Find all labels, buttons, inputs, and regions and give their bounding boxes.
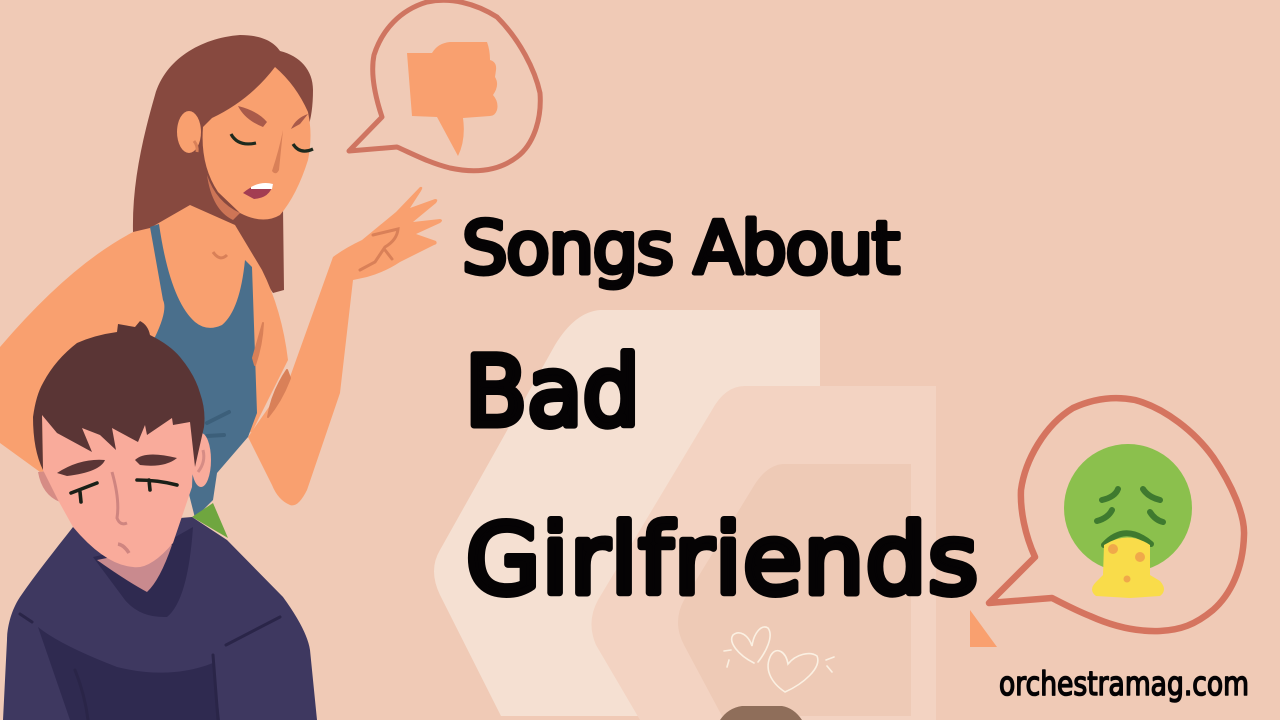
boy ear inner shade	[198, 450, 204, 472]
woman hair	[133, 35, 313, 293]
bubble outline	[989, 398, 1244, 631]
speech bubble: thumbs down	[349, 0, 540, 171]
tank top folds	[207, 412, 229, 436]
boy face	[42, 410, 195, 567]
collarbone	[213, 252, 227, 258]
boy left ear shade	[38, 470, 60, 502]
woman brows	[238, 106, 308, 129]
face mouth	[1104, 533, 1151, 545]
sweater collar shadow	[93, 527, 193, 617]
boy neck	[97, 545, 172, 592]
vomit	[1092, 538, 1164, 598]
boy hair	[33, 321, 204, 470]
boy mouth	[118, 544, 129, 553]
vomit spots	[1108, 544, 1145, 582]
icon: thumbs down	[407, 42, 498, 156]
woman body and shoulder arm	[0, 205, 288, 472]
title: Songs About: Songs About	[462, 206, 900, 290]
woman ear	[177, 111, 201, 153]
ear inner shade	[194, 141, 197, 152]
sweater lower shadow	[38, 627, 220, 720]
background hexagon shapes	[434, 310, 936, 720]
face brows and eyes	[1097, 489, 1163, 522]
icon: hearts	[724, 627, 834, 692]
woman eyes	[231, 134, 313, 151]
woman nose	[272, 130, 283, 173]
bubble outline	[349, 0, 540, 171]
woman face	[203, 67, 310, 220]
illustration: sad boy	[3, 321, 317, 720]
woman tank top	[150, 224, 257, 518]
orange triangle	[970, 610, 997, 647]
arm shadows	[253, 323, 290, 417]
title: Girlfriends: Girlfriends	[466, 504, 978, 616]
boy sweater	[3, 517, 317, 720]
green skirt	[192, 503, 228, 538]
boy brows	[57, 454, 177, 476]
sweater fold lines	[20, 614, 280, 720]
illustration: angry woman	[0, 35, 442, 538]
title: Bad: Bad	[465, 336, 640, 448]
boy nose	[112, 472, 127, 524]
boy eyes	[71, 480, 177, 502]
neck shadow	[207, 175, 240, 220]
speech bubble: vomiting face	[989, 398, 1244, 631]
hand detail	[360, 229, 398, 270]
boy right ear	[191, 433, 211, 487]
woman forearm and hand	[248, 187, 442, 505]
brown shape at bottom edge	[720, 706, 802, 720]
icon: green face	[1064, 444, 1192, 572]
woman mouth	[243, 184, 273, 199]
